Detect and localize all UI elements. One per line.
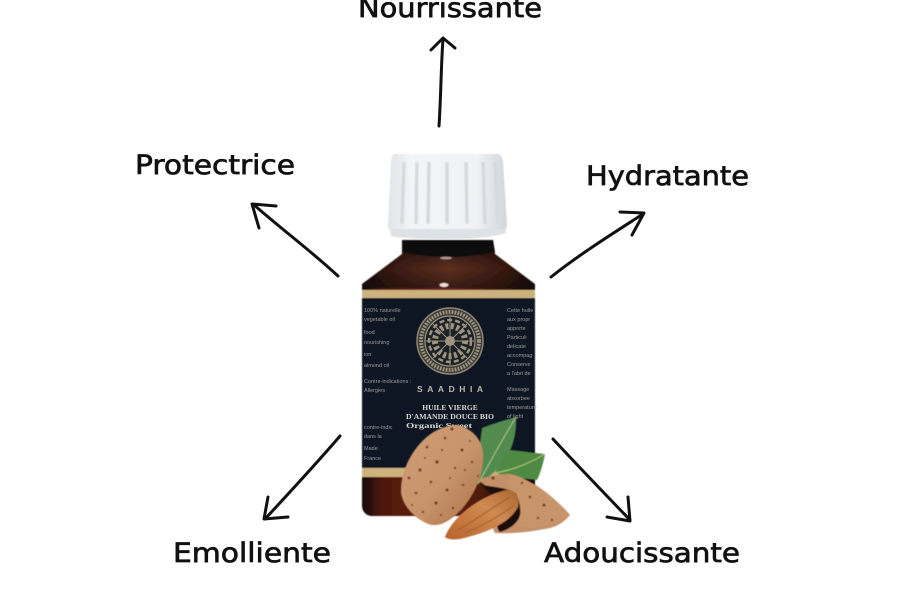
left side notes: vegetable oil	[364, 317, 395, 323]
left side notes: ion	[364, 352, 371, 358]
product name: HUILE VIERGE	[422, 403, 478, 412]
gold band top	[362, 290, 535, 298]
cap	[388, 154, 507, 239]
icon: Saadhia mandala	[417, 308, 483, 374]
neck and shoulders	[362, 240, 535, 292]
half shell	[478, 474, 570, 533]
left side notes: Made	[364, 446, 378, 452]
left side notes: France	[364, 456, 381, 462]
black label	[362, 298, 535, 468]
gold band bottom	[362, 468, 535, 477]
right side notes	[507, 308, 537, 420]
product name: Organic Sweet	[406, 421, 473, 430]
right side notes: of light	[507, 414, 524, 420]
heading: Protectrice: Protectrice	[135, 150, 295, 181]
right side notes: apporte	[507, 326, 526, 332]
right side notes: absorbee	[507, 396, 530, 402]
bottle body	[362, 288, 535, 516]
right side notes: Massage	[507, 387, 529, 393]
left side notes: dans la	[364, 434, 383, 440]
left side notes: nourishing	[364, 340, 389, 346]
kernel	[445, 490, 519, 539]
brand name: SAADHIA	[417, 384, 483, 394]
left side notes: almond oil	[364, 363, 389, 369]
left side notes: food	[364, 330, 375, 336]
illustration: almonds and leaves	[401, 417, 570, 539]
right side notes: Conserve	[507, 362, 531, 368]
heading: Emolliente: Emolliente	[173, 538, 331, 569]
heading: Adoucissante: Adoucissante	[544, 538, 740, 569]
right side notes: delicate	[507, 344, 526, 350]
left side notes: Contre-indications :	[364, 379, 412, 385]
right side notes: a l'abri de	[507, 371, 531, 377]
right side notes: Particuli	[507, 335, 527, 341]
arrow: to Hydratante	[551, 212, 644, 277]
right side notes: accompag	[507, 353, 532, 359]
product name: D'AMANDE DOUCE BIO	[406, 412, 494, 421]
left side notes: contre-indic	[364, 425, 393, 431]
whole almond shell	[401, 425, 483, 525]
arrow: up to Nourrissante	[431, 38, 455, 126]
right side notes: aux propr	[507, 317, 530, 323]
arrow: to Adoucissante	[553, 439, 630, 521]
leaf right	[495, 450, 545, 480]
left side notes: Allergies	[364, 388, 385, 394]
left side notes: 100% naturelle	[364, 308, 401, 314]
arrow: to Protectrice	[252, 204, 338, 276]
right side notes: temperature	[507, 405, 537, 411]
leaf back	[478, 417, 516, 484]
bottle	[362, 154, 535, 516]
heading: Hydratante: Hydratante	[586, 161, 749, 192]
label text	[364, 308, 537, 462]
product name	[406, 403, 494, 430]
left side notes	[364, 308, 412, 462]
arrow: to Emolliente	[264, 436, 340, 519]
right side notes: Cette huile	[507, 308, 533, 314]
